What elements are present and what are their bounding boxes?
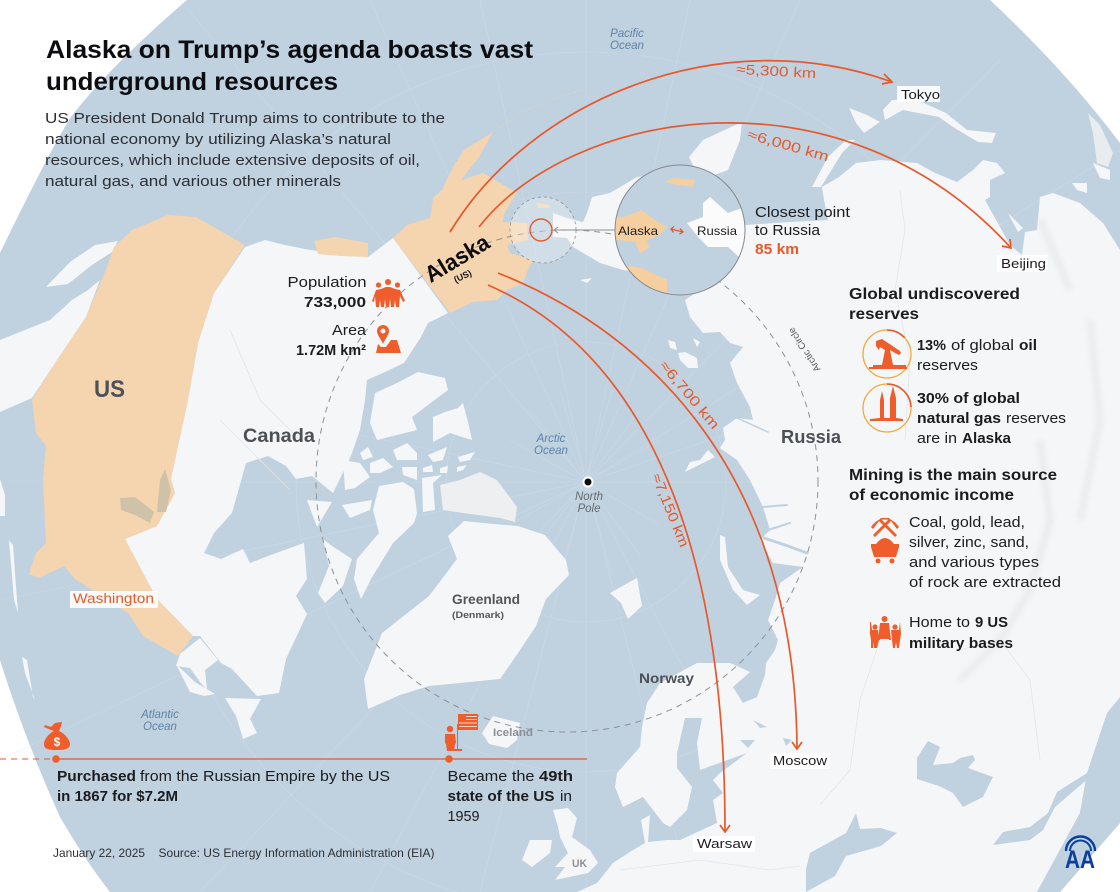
label: Greenland: Greenland (452, 591, 520, 607)
intro paragraph (45, 110, 445, 190)
date and source: Source: US Energy Information Administration (EIA) (158, 846, 434, 860)
icon: money bag (44, 722, 70, 750)
stat: population: Population (288, 274, 366, 291)
US territory (29, 215, 245, 656)
title (46, 36, 534, 96)
text: 49th state: 49th (539, 768, 573, 785)
text: minerals extracted: and various types (909, 554, 1039, 571)
icon: people (372, 279, 405, 307)
text: minerals extracted: silver, zinc, sand, (909, 534, 1029, 551)
stat: area: Area (332, 322, 367, 339)
label: Alaska: (US) (452, 268, 473, 285)
stat: 30 percent natural gas: Alaska (962, 430, 1012, 447)
city label: Beijing (997, 255, 1048, 272)
heading: reserves (849, 306, 919, 323)
inset: Alaska (610, 210, 667, 253)
inset label: Alaska: Alaska (618, 224, 658, 238)
text: closest point to Russia (755, 204, 851, 258)
stat: 30 percent natural gas: reserves (1006, 410, 1066, 427)
Aleutian island chain (493, 90, 596, 132)
text: 49th state (448, 768, 573, 825)
North Pole marker (575, 476, 603, 515)
heading (849, 286, 1020, 323)
text: minerals extracted (909, 514, 1061, 591)
Atlantic Ocean: Atlantic (140, 709, 179, 721)
land: Arctic Archipelago islands (176, 372, 517, 739)
distance: 6,700 km: ≈6,700 km (657, 357, 723, 432)
text: military bases (909, 614, 1013, 652)
inset double arrow (671, 226, 683, 234)
intro paragraph: resources, which include extensive deposits of oil, (45, 152, 420, 169)
timeline (0, 714, 587, 825)
arc to Tokyo (450, 61, 892, 232)
land: UK and Ireland (522, 808, 598, 880)
label: US: US (94, 376, 125, 403)
text: purchased in 1867 (57, 768, 390, 805)
distance: 6,000 km: ≈6,000 km (746, 126, 831, 164)
text: 49th state: in (560, 788, 572, 805)
inset label: Russia: Russia (697, 224, 737, 238)
inset: Russia (687, 197, 744, 256)
icon: person with flag (445, 714, 478, 751)
land: left margin strips (0, 241, 118, 700)
text: minerals extracted: Coal, gold, lead, (909, 514, 1025, 531)
Atlantic Ocean: Ocean (143, 721, 177, 733)
city label: Moscow: Moscow (773, 753, 828, 768)
logo: Anadolu Agency: AA (1065, 846, 1095, 874)
North Pole marker: North (575, 491, 603, 503)
distance: 7,150 km: ≈7,150 km (649, 471, 693, 549)
text: military bases: 9 US (975, 614, 1008, 631)
icon: money bag: $ (54, 735, 61, 749)
city label: Washington: Washington (73, 590, 154, 606)
land: Greenland (364, 521, 569, 709)
title: underground resources (46, 68, 338, 96)
text: military bases: Home to (909, 614, 970, 631)
country labels (94, 376, 842, 870)
arc to Beijing (479, 123, 1011, 248)
land: far east peninsula (689, 122, 742, 180)
inset: island (665, 178, 695, 187)
stat: 13 percent oil: oil (1019, 337, 1037, 354)
inset: Alaska south coast (624, 265, 667, 293)
stat: area (296, 322, 401, 359)
land: islands of the Arctic and Pacific (580, 100, 1113, 619)
text: purchased in 1867: Purchased (57, 768, 136, 785)
title: Alaska on Trump’s agenda boasts vast (46, 36, 534, 64)
text: closest point to Russia: Closest point (755, 204, 851, 221)
Alaska panhandle islands (314, 237, 368, 257)
text: 49th state: state of the US (448, 788, 554, 805)
rivers and borders (220, 190, 1040, 870)
heading (849, 467, 1057, 504)
icon: oil pump gauge (863, 330, 911, 378)
stat: 13 percent oil: of global (951, 337, 1014, 354)
relief shading on Eurasia (960, 220, 1100, 680)
Pacific Ocean: Ocean (610, 40, 644, 52)
intro paragraph: national economy by utilizing Alaska’s natural (45, 131, 391, 148)
Russian Arctic gulfs (737, 418, 807, 553)
intro paragraph: natural gas, and various other minerals (45, 173, 341, 190)
label: Alaska: Alaska (420, 229, 494, 288)
closest-point lens area (510, 197, 576, 263)
land: Iceland (482, 716, 520, 748)
city label: Warsaw: Warsaw (697, 836, 753, 851)
island in lens area (537, 203, 550, 208)
icon: map pin (376, 325, 401, 353)
inset map: Bering Strait (610, 165, 750, 295)
text: 49th state: Became the (448, 768, 534, 785)
text: 49th state: 1959 (448, 808, 480, 825)
Arctic Ocean: Ocean (534, 445, 568, 457)
label: Iceland: Iceland (493, 727, 533, 739)
text: closest point to Russia: to Russia (755, 222, 821, 239)
Arctic Circle dashed line (316, 230, 818, 732)
stat: population: 733,000 (304, 294, 366, 311)
label: Denmark: (Denmark) (452, 610, 504, 621)
lakes in the US (120, 469, 171, 523)
stat: 13 percent oil: reserves (917, 357, 978, 374)
stat: 13 percent oil: 13% (917, 337, 946, 354)
intro paragraph: US President Donald Trump aims to contribute to the (45, 110, 445, 127)
label: Arctic Circle: Arctic Circle (786, 325, 823, 374)
heading: Mining is the main source (849, 467, 1057, 484)
land: Eurasia (577, 160, 1120, 892)
stat: population (288, 274, 405, 311)
distance arcs (450, 61, 1011, 832)
arc to Warsaw (488, 285, 730, 832)
city label: Tokyo: Tokyo (901, 87, 940, 102)
Arctic Ocean: Arctic (536, 433, 566, 445)
text: purchased in 1867: from the Russian Empire by the US (140, 768, 390, 785)
label: UK: UK (572, 858, 587, 870)
text: minerals extracted: of rock are extracted (909, 574, 1061, 591)
logo: Anadolu Agency (1065, 836, 1095, 874)
stat: 30 percent natural gas: natural gas (917, 410, 1001, 427)
icon: gas rigs gauge (863, 384, 911, 432)
closest-point marker and leader (530, 219, 616, 241)
distance: 5,300 km: ≈5,300 km (736, 61, 817, 81)
arc to Moscow (498, 273, 802, 749)
North Pole marker: Pole (577, 503, 601, 515)
heading: Global undiscovered (849, 286, 1020, 303)
text: purchased in 1867: in 1867 for $7.2M (57, 788, 178, 805)
date and source: January 22, 2025 (53, 846, 145, 860)
Pacific Ocean: Pacific (610, 28, 644, 40)
label: Norway: Norway (639, 670, 694, 686)
city label: Beijing: Beijing (1001, 256, 1046, 271)
inland seas and lakes (700, 545, 1120, 892)
stat: 30 percent natural gas (917, 390, 1066, 447)
text: military bases: military bases (909, 635, 1013, 652)
text: closest point to Russia: 85 km (755, 241, 799, 258)
land: Chukotka (553, 175, 670, 275)
stat: 13 percent oil (917, 337, 1037, 374)
icon: pickaxes and mine cart (871, 518, 899, 564)
land: Canada (125, 238, 448, 696)
panel: global undiscovered reserves (849, 286, 1066, 447)
stat: 30 percent natural gas: are in (917, 430, 957, 447)
heading: of economic income (849, 487, 1014, 504)
Alaska territory (393, 132, 533, 313)
label: Canada: Canada (243, 426, 315, 447)
stat: area: 1.72M km² (296, 342, 366, 359)
stat: 30 percent natural gas: 30% of global (917, 390, 1020, 407)
ocean labels (140, 28, 644, 733)
label: Russia: Russia (781, 427, 842, 447)
icon: military people (870, 616, 901, 648)
panel: mining (849, 467, 1061, 652)
